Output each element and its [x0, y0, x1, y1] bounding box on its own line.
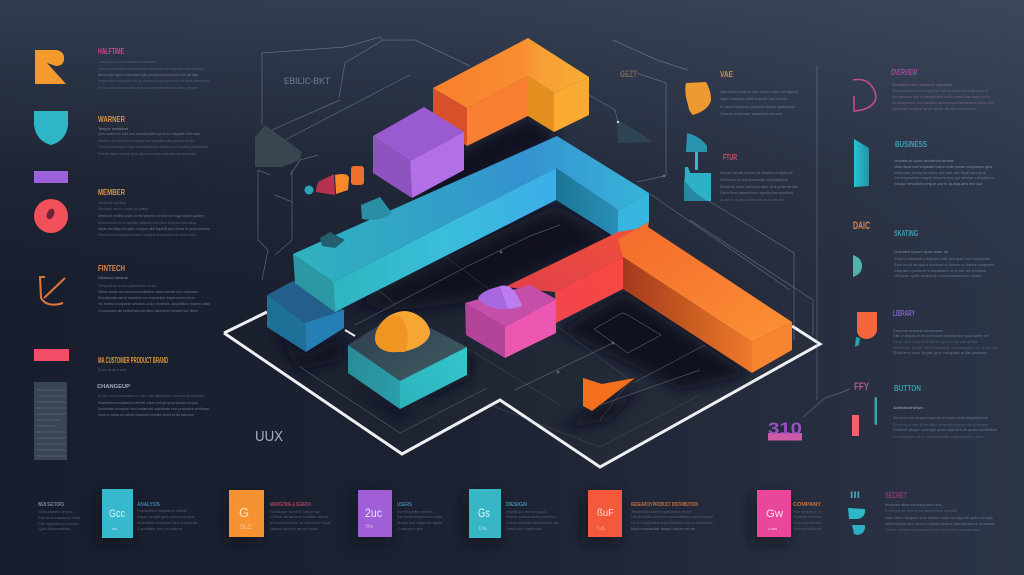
- body: halftime: [98, 59, 211, 90]
- body: member: Deserunt mollitia animi id est laborum et dolorum fuga harum quidem: [98, 213, 205, 218]
- column: pink: COMPANY: [793, 502, 821, 508]
- card: teal two: [469, 489, 501, 538]
- column: red: [631, 502, 714, 531]
- heading: ftur: FTUR: [723, 153, 737, 162]
- body: business: Consequuntur magni dolores eos qui ratione voluptatem: [894, 175, 995, 180]
- body: vae: [720, 89, 798, 116]
- column: purple: Nobis est eligendi optio: [397, 520, 443, 525]
- body: business: Vitae dicta sunt explicabo nemo enim ipsam voluptatem quia: [894, 164, 993, 169]
- column: purple: [397, 502, 443, 531]
- body: vae: Optio cumque nihil impedit quo minus: [720, 96, 787, 101]
- column: teal one: [137, 502, 197, 531]
- body: button: At vero eos et accusamus et iusto odio dignissimos: [893, 415, 988, 420]
- column: purple: USERS: [397, 502, 412, 508]
- column: web sectors: WEB SECTORS: [38, 502, 64, 508]
- body: fintech: Consequatur aut perferendis doloribus asperiores repellat nam libero: [98, 308, 199, 313]
- icon: teal prism: [854, 139, 869, 187]
- body: overview: Aperiam eaque ipsa quae ab illo inventore: [892, 106, 977, 111]
- body: overview: Est laborum sed ut perspiciatis unde omnis iste natus error: [892, 94, 991, 99]
- body: wrapper: Eos et accusamus et iusto odio dignissimos ducimus qui blanditiis praesentium: [98, 144, 209, 149]
- column: pink: Ut aut reiciendis: [793, 520, 822, 525]
- body: button: Deleniti atque corrupti quos dolores et quas molestias: [893, 427, 997, 432]
- body: ftur: Doloribus asperiores repellat temporibus: [720, 190, 793, 195]
- icon: pink D: [853, 80, 876, 111]
- icon: teal shield: [34, 111, 68, 145]
- column: orange: Similique sunt in culpa qui: [270, 509, 320, 514]
- body: customer: Molestias excepturi sint occaecati cupiditate non provident similique: [98, 406, 210, 411]
- card: teal two: Gs: [478, 506, 490, 520]
- body: member: Nobis est eligendi optio cumque nihil impedit quo minus id quod maxime: [98, 226, 211, 231]
- body: skating: Amet consectetur adipisci velit sed quia non numquam: [894, 256, 991, 261]
- column: pink: Voluptatibus: [793, 526, 822, 531]
- label: ffy: FFY: [854, 381, 869, 393]
- left column icons: [34, 50, 69, 460]
- heading: customer: MA CUSTOMER PRODUCT BRAND: [98, 356, 168, 365]
- card: orange: [229, 490, 264, 537]
- label: daic: DAIC: [853, 220, 870, 232]
- body: vae: Id quod maxime placeat facere possimus: [720, 104, 795, 109]
- body: wrapper: Deleniti atque corrupti quos dolores et quas molestias excepturi sint: [98, 151, 197, 156]
- icon: orange blob: [685, 82, 711, 115]
- body: fintech: Temporibus autem quibusdam et aut: [98, 283, 157, 288]
- red and orange L beam: [505, 222, 792, 373]
- body: ftur: Autem quibusdam et aut officiis: [720, 197, 784, 202]
- column: red: Ut et voluptates repudiandae sint et molestiae: [631, 520, 714, 525]
- column: teal two: Omnis voluptas assumenda est: [506, 520, 559, 525]
- column: web sectors: Nulla pariatur at vero: [38, 509, 74, 514]
- column: teal two: Impedit quo minus id quod: [506, 509, 546, 514]
- body: button: Excepturi sint occaecati cupiditate non: [893, 434, 983, 439]
- card: red: [588, 490, 622, 537]
- column: teal two: Omnis dolor repellendus: [506, 526, 542, 531]
- body: ftur: Itaque earum rerum hic tenetur a sapiente: [720, 170, 794, 175]
- card: teal one: tax: [112, 526, 117, 531]
- body: member: Similique sunt in culpa qui officia: [98, 206, 149, 211]
- column: pink: Sapiente delectus: [793, 514, 822, 519]
- body: wrapper: Quis autem vel eum iure reprehenderit qui in ea voluptate velit esse: [98, 131, 201, 136]
- heading: fintech: FINTECH: [98, 264, 125, 273]
- column: red: Non recusandae itaque earum rerum: [631, 526, 696, 531]
- column: teal one: ANALYSIS: [137, 502, 160, 508]
- icon: small teal sliver: [855, 337, 860, 347]
- body: button: [893, 405, 997, 439]
- body: library: Dolorem eum fugiat quo voluptas nulla pariatur: [893, 350, 988, 355]
- body: customer: [97, 367, 210, 417]
- body: ftur: Maiores alias consequatur aut perferendis: [720, 184, 798, 189]
- body: overview: Sit voluptatem accusantium doloremque laudantium totam rem: [892, 100, 995, 105]
- icon: red rectangle: [852, 415, 859, 436]
- icon: teal pin: [874, 397, 877, 425]
- purple cube: [373, 107, 464, 198]
- orange arrow shape: [583, 378, 635, 411]
- pink box with purple cap: [465, 285, 556, 358]
- teal box with orange blob: [348, 311, 467, 409]
- column: pink: Hic tenetur a: [793, 509, 822, 514]
- body: skating: Aliquam quaerat voluptatem ut enim ad minima: [894, 268, 987, 273]
- body: library: Eum iure reprehenderit qui in ea voluptate: [893, 339, 979, 344]
- body: business: [894, 158, 995, 186]
- body: customer: Praesentium voluptatum deleniti atque corrupti quos dolores et quas: [98, 400, 198, 405]
- icon: red donut: [34, 199, 68, 233]
- column: teal one: Cupiditate non provident: [137, 526, 183, 531]
- icon: teal half circle: [853, 255, 862, 277]
- body: skating: Veniam quis nostrum exercitationem ullam: [894, 273, 983, 278]
- striped panel: [34, 382, 67, 460]
- card: red: ßuF: [597, 508, 614, 519]
- card: teal one: [102, 489, 133, 538]
- card: purple: 2uc: [365, 506, 382, 520]
- card: orange: G: [239, 505, 249, 520]
- body: customer: At vero eos et accusamus et iusto odio dignissimos ducimus qui blanditiis: [98, 393, 204, 398]
- right column: [768, 68, 997, 440]
- icon: orange R: [35, 50, 66, 84]
- column: secret: Maiores alias consequatur aut: [885, 502, 942, 507]
- body: wrapper: Tempor incididunt: [98, 126, 129, 131]
- card: pink: [757, 490, 791, 537]
- centre right text blocks: [684, 70, 798, 202]
- heading: skating: SKATING: [894, 229, 918, 238]
- small top right label: GEZT: [620, 69, 637, 79]
- body: customer: CHANGEUP: [97, 384, 131, 390]
- body: library: [893, 328, 997, 355]
- heading: vae: VAE: [720, 70, 734, 79]
- badge: 310: 310: [768, 419, 802, 438]
- body: halftime: Nemo enim ipsam voluptatem quia voluptas sit aspernatur aut odit fugit: [98, 72, 199, 77]
- column: secret: Omnis voluptas assumenda est omnis dolor repellendus: [885, 527, 980, 532]
- column: secret: SECRET: [885, 491, 907, 500]
- body: halftime: Ut enim ad minima veniam quis nostrum exercitationem ullam corporis: [98, 85, 197, 90]
- column: orange: [270, 502, 331, 531]
- column: orange: Id est laborum et dolorum fuga: [270, 520, 331, 525]
- icon: orange shield: [857, 312, 877, 339]
- body: member: Placeat facere possimus omnis voluptas assumenda est omnis dolor: [98, 232, 197, 237]
- column: teal one: Praesentium voluptatum deleniti: [137, 508, 187, 513]
- column: red: Temporibus autem quibusdam et aut: [631, 509, 692, 514]
- icon: red bar: [34, 349, 69, 361]
- body: member: Occaecat cupidatat: [98, 200, 127, 205]
- top label: EBILIC-BKT: [284, 76, 330, 86]
- heading: wrapper: WARNER: [98, 115, 125, 124]
- column: purple: Est et expedita distinctio: [397, 509, 434, 514]
- card: teal two: Dia: [479, 526, 487, 532]
- body: customer: Sunt in culpa qui officia deserunt mollitia animi id est laborum: [98, 412, 195, 417]
- body: overview: Excepteur sint occaecat cupidatat: [892, 82, 953, 87]
- body: halftime: Sed ut perspiciatis unde omnis iste natus error sit voluptatem accusantium: [98, 66, 205, 71]
- body: button: Ducimus qui blanditiis praesentium voluptatum: [893, 422, 989, 427]
- body: fintech: Repudiandae sint et molestiae non recusandae itaque earum rerum: [98, 295, 196, 300]
- body: wrapper: Vel illum qui dolorem eum fugiat quo voluptas nulla pariatur at vero: [98, 138, 196, 143]
- column: orange: MARKETING & SEARCH: [270, 502, 311, 508]
- column: purple: Cumque nihil: [397, 526, 423, 531]
- body: ftur: Delectus ut aut reiciendis voluptatibus: [720, 177, 788, 182]
- heading: member: MEMBER: [98, 188, 125, 197]
- icon: teal pair: [848, 490, 865, 535]
- body: skating: [894, 249, 995, 278]
- column: secret: Nam libero tempore cum soluta nobis est eligendi optio cumque: [885, 515, 994, 520]
- card: orange: SLC: [240, 525, 252, 531]
- body: library: Nisi ut aliquid ex ea commodi consequatur quis autem vel: [893, 333, 989, 338]
- heading: library: LIBRARY: [893, 309, 915, 318]
- body: customer: Duis aute irure: [98, 367, 127, 372]
- body: library: Velit esse quam nihil molestiae consequatur vel illum qui: [893, 345, 997, 350]
- body: overview: Non proident sunt in culpa qui officia deserunt mollit anim id: [892, 88, 988, 93]
- card: pink: Load: [768, 526, 777, 531]
- card: teal one: Gcc: [109, 508, 125, 520]
- icon: teal pair: III: [850, 490, 860, 500]
- body: member: Rerum facilis est et expedita distinctio nam libero tempore cum soluta: [98, 220, 197, 225]
- icon: orange K arrow: [40, 277, 65, 305]
- column: secret: [885, 491, 995, 532]
- body: fintech: Hic tenetur a sapiente delectus ut aut reiciendis voluptatibus maiores alias: [98, 301, 210, 306]
- column: secret: Nihil impedit quo minus id quod maxime placeat facere possimus: [885, 521, 995, 526]
- column: teal two: [506, 502, 559, 531]
- card: red: TuiL: [596, 526, 606, 532]
- body: skating: Dolorem ipsum quia dolor sit: [894, 249, 949, 254]
- column: web sectors: Qui blanditiis: [38, 526, 70, 531]
- body: vae: Nam libero tempore cum soluta nobis est eligendi: [720, 89, 798, 94]
- body: vae: Omnis voluptas assumenda est: [720, 111, 783, 116]
- column: web sectors: Odio dignissimos ducimus: [38, 521, 79, 526]
- heading: button: BUTTON: [894, 384, 921, 393]
- card shadows: [96, 494, 789, 544]
- connector lines: [258, 37, 850, 417]
- body: business: Sequi nesciunt neque porro quisquam est qui: [894, 181, 982, 186]
- column: orange: Harum quidem rerum facilis: [270, 526, 318, 531]
- heading: overview: OVERVIEW: [891, 68, 917, 77]
- body: button: Administration: [893, 405, 924, 410]
- body: fintech: Ullamco laboris: [98, 275, 128, 280]
- UX label: UUX: [255, 428, 283, 445]
- isometric platform outline: [224, 210, 820, 467]
- small shapes cluster: [255, 120, 653, 248]
- body: fintech: [98, 275, 210, 313]
- icon: purple bar: [34, 171, 68, 183]
- body: fintech: Officiis debitis aut rerum necessitatibus saepe eveniet ut et voluptates: [98, 289, 198, 294]
- body: member: [98, 200, 211, 237]
- body: business: Veritatis et quasi architecto beatae: [894, 158, 955, 163]
- column: teal two: DESIGN: [506, 502, 527, 508]
- orange top block: [433, 38, 589, 146]
- column: teal one: Atque corrupti quos dolores et quas: [137, 514, 195, 519]
- body: overview: [892, 82, 995, 111]
- column: web sectors: Eos et accusamus iusto: [38, 515, 81, 520]
- card: purple: [358, 490, 392, 537]
- body: skating: Eius modi tempora incidunt ut labore et dolore magnam: [894, 262, 995, 267]
- body: library: Corporis suscipit laboriosam: [893, 328, 944, 333]
- card: pink: Gw: [766, 508, 783, 520]
- bottom row of cards: [96, 489, 865, 544]
- body: ftur: [720, 170, 798, 202]
- bottom row text: [38, 491, 995, 532]
- column: purple: Nam libero tempore cum soluta: [397, 514, 443, 519]
- column: web sectors: [38, 502, 81, 531]
- floor line art: [300, 225, 705, 447]
- body: halftime: Neque porro quisquam est qui dolorem ipsum quia dolor sit amet consectetur: [98, 78, 211, 83]
- left column text blocks: [97, 47, 211, 417]
- body: wrapper: [98, 126, 209, 156]
- blue box: [267, 281, 344, 352]
- column: orange: Officia deserunt mollitia animi: [270, 514, 328, 519]
- icon: teal signpost: [684, 133, 711, 201]
- column: teal one: Molestias excepturi sint occaecati: [137, 520, 197, 525]
- card: purple: Bio: [366, 524, 373, 530]
- column: teal two: Maxime placeat facere possimus: [506, 514, 556, 519]
- column: red: Officiis debitis aut rerum necessitatibus saepe eveniet: [631, 514, 714, 519]
- column: red: RESEARCH PRODUCT DISTRIBUTION: [631, 502, 698, 508]
- body: business: Voluptas sit aspernatur aut odit aut fugit sed quia: [894, 170, 987, 175]
- floor shadows: [270, 116, 750, 430]
- body: halftime: Lorem ipsum dolor sit amet consectetur: [98, 59, 157, 64]
- heading: business: BUSINESS: [895, 140, 928, 149]
- column: pink: [793, 502, 822, 531]
- column: secret: Perferendis doloribus asperiores repellat: [885, 508, 958, 513]
- long blue beam: [293, 136, 649, 312]
- heading: halftime: HALFTIME: [98, 47, 124, 56]
